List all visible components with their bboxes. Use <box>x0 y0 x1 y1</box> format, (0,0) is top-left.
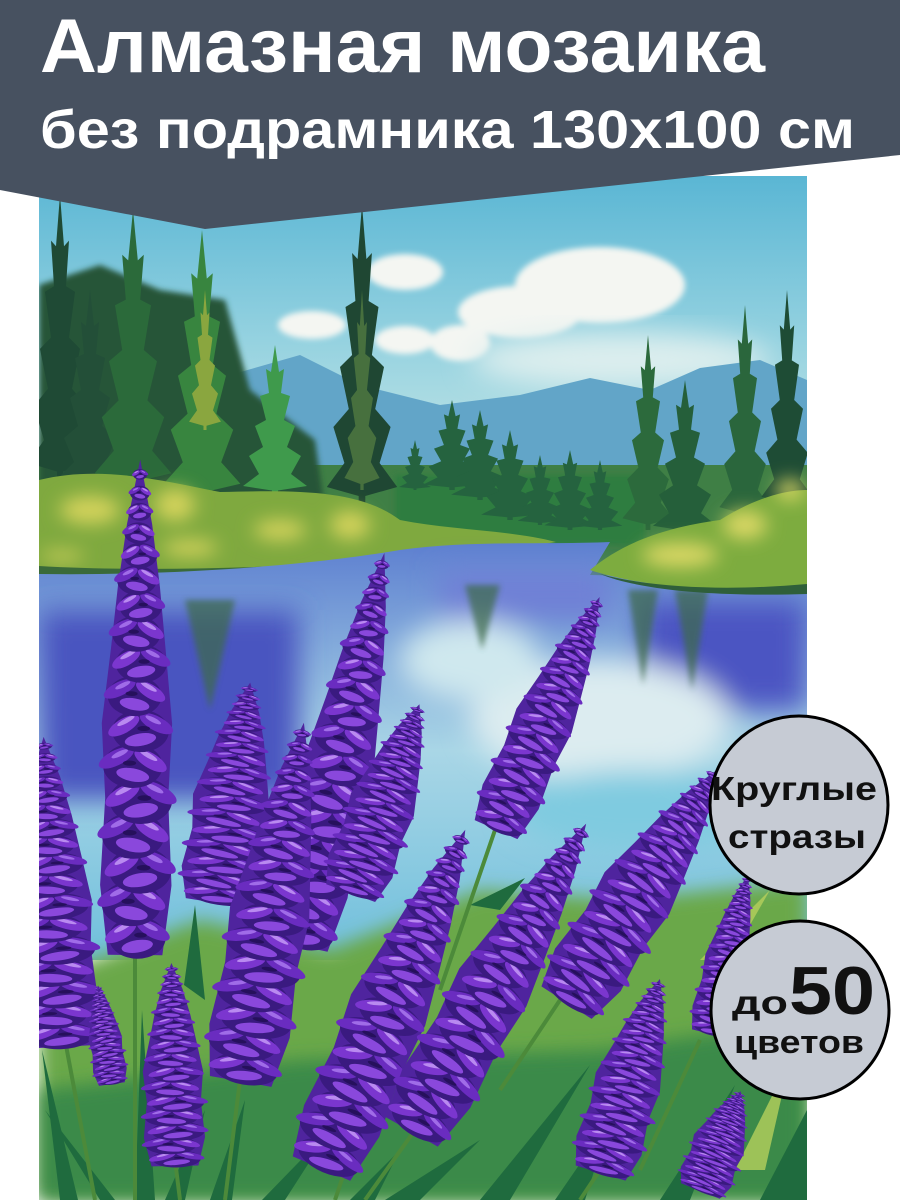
badge: up to 50 colors: 50 <box>789 953 875 1029</box>
badge: up to 50 colors <box>711 921 889 1099</box>
lake water <box>39 542 807 960</box>
lavender spikes <box>0 459 773 1200</box>
heading: title line 1: Алмазная мозаика <box>40 4 766 89</box>
badge: round rhinestones <box>710 716 888 894</box>
badge: round rhinestones: стразы <box>728 818 866 855</box>
foreground grass <box>39 878 807 1200</box>
far bank green backing <box>39 465 807 576</box>
meadow far bank left <box>39 474 556 578</box>
badge: round rhinestones: Круглые <box>711 770 877 807</box>
forest right trees <box>622 290 813 535</box>
sky with clouds <box>39 176 807 476</box>
meadow far bank right <box>590 480 807 595</box>
forest far treeline <box>395 400 645 545</box>
heading: title line 2: без подрамника 130х100 см <box>40 100 855 160</box>
lavender stems <box>65 830 700 1200</box>
forest left trees <box>28 195 397 510</box>
panel: lake landscape painting <box>0 176 813 1200</box>
title banner <box>0 0 900 229</box>
badge: up to 50 colors: до <box>732 984 788 1021</box>
badge: up to 50 colors: цветов <box>734 1024 864 1060</box>
mountains <box>242 355 807 465</box>
